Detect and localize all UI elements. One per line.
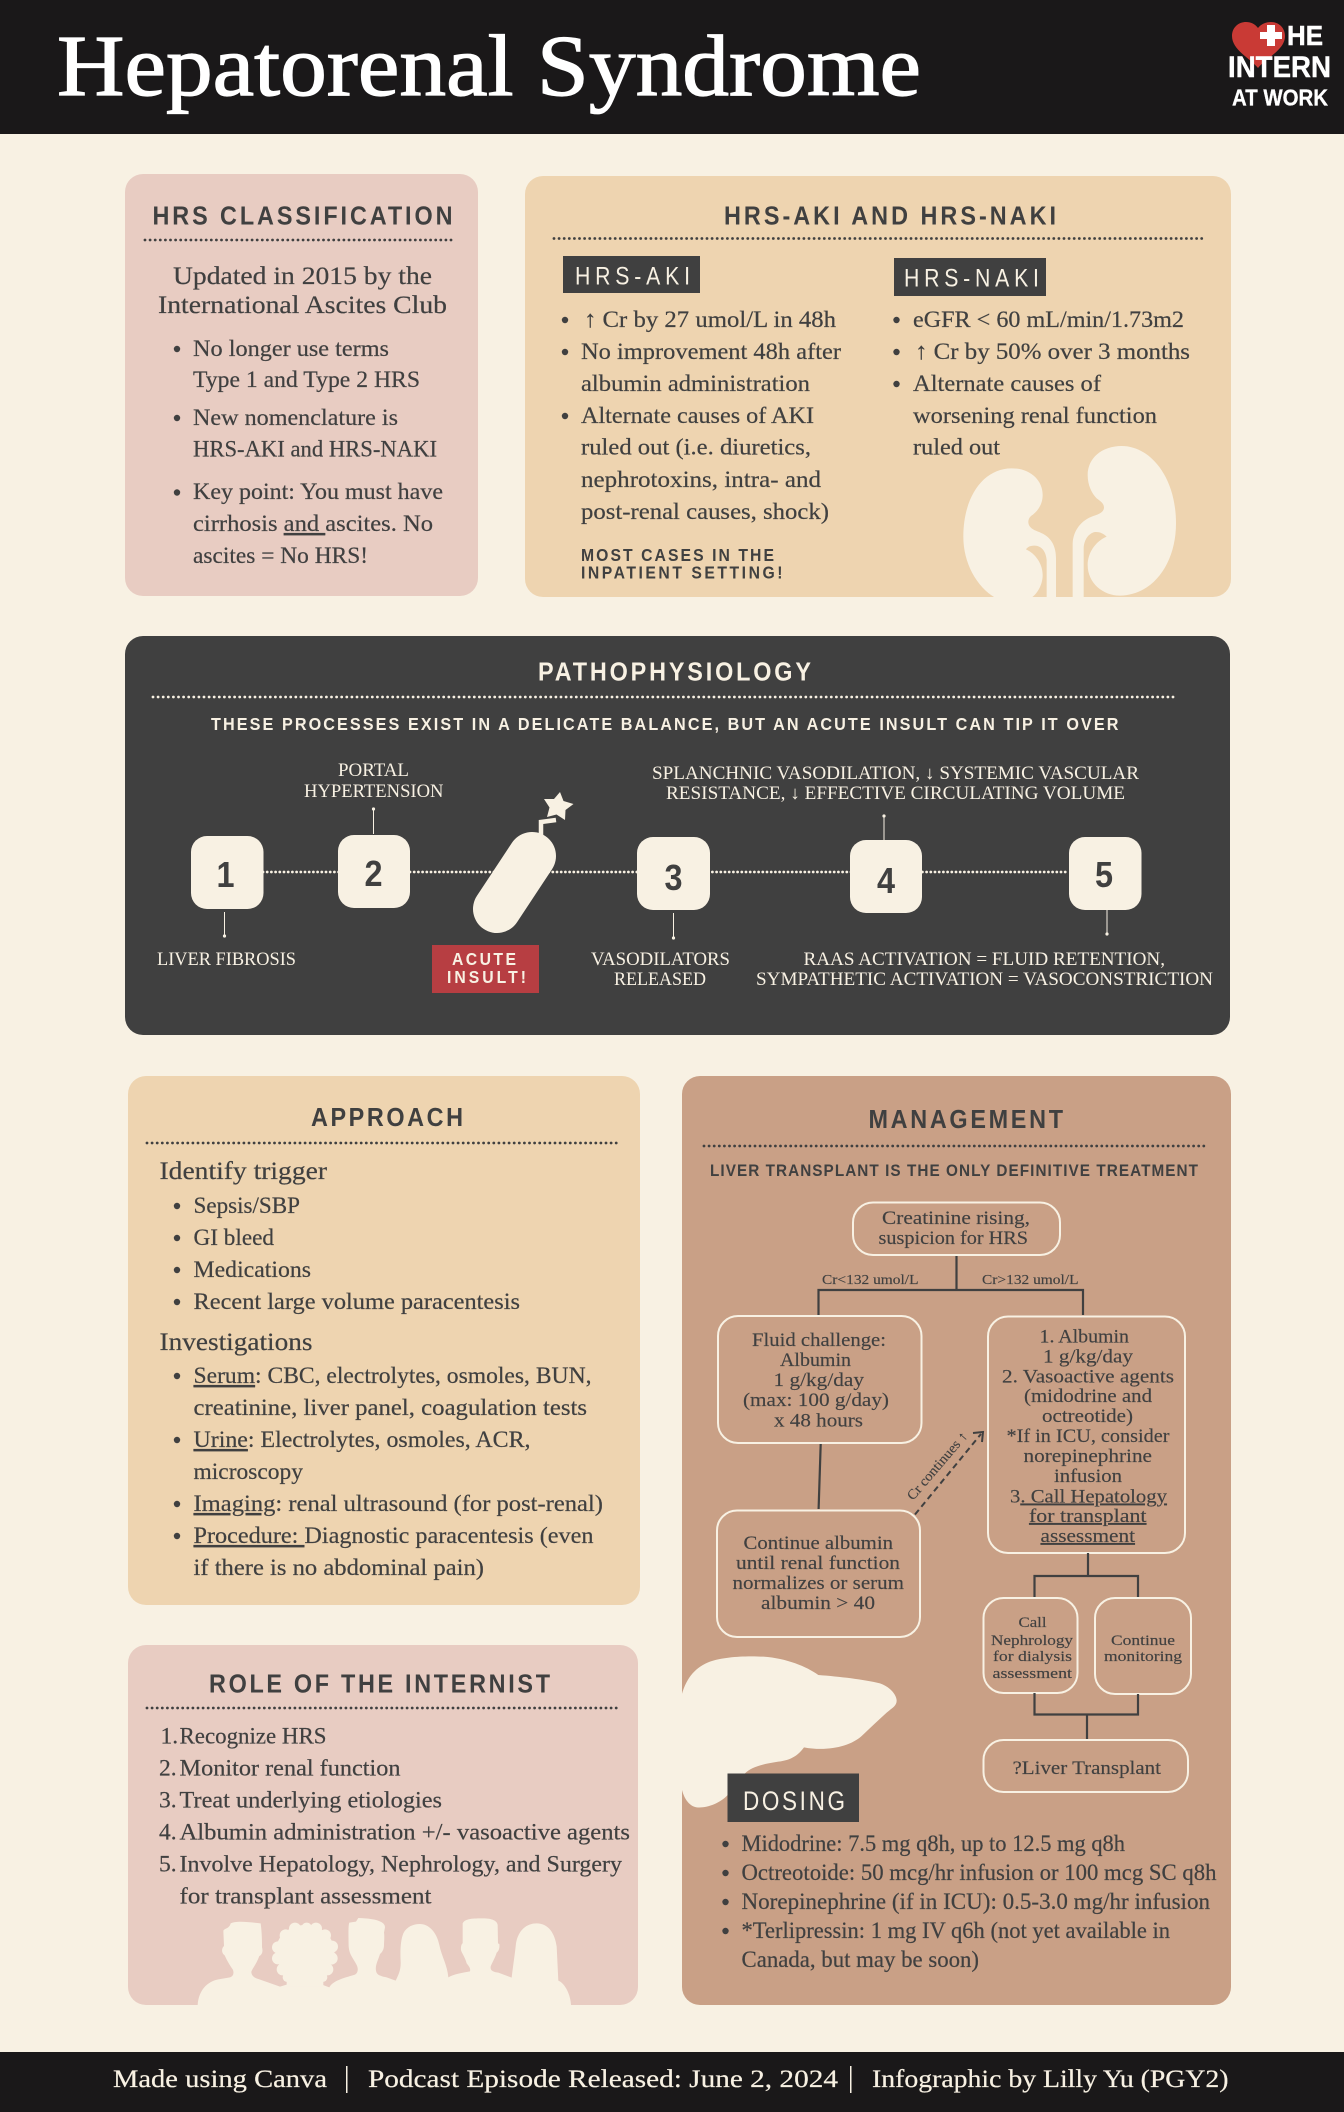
step 5: RAAS and sympathetic activation: 5 [1095,855,1113,895]
bullet list: HRS-AKI criteria: post-renal causes, shock) [581,499,829,525]
flow box: albumin and vasoactive agents: norepinephrine [1024,1447,1152,1467]
bullet list: dosing: *Terlipressin: 1 mg IV q6h (not yet available in [742,1918,1170,1944]
flow box: liver transplant [984,1740,1188,1792]
bullet list: classification: New nomenclature is [193,405,398,431]
bullet list: HRS-AKI criteria: ruled out (i.e. diuretics, [581,434,811,460]
flow box: fluid challenge: 1 g/kg/day [774,1371,865,1391]
bullet list: HRS-AKI criteria: nephrotoxins, intra- and [581,467,821,493]
numbered list: internist role: for transplant assessment [180,1884,432,1910]
tag: dosing: DOSING [743,1787,845,1816]
arrow: creatinine continues rising: Cr continues ↑ [905,1429,971,1504]
heading: approach: APPROACH [311,1104,463,1132]
panel: pathophysiology [125,636,1230,1035]
flow box: continue albumin: albumin > 40 [761,1594,875,1614]
numbered list: internist role: 2. [159,1756,177,1782]
step 2: portal hypertension [304,761,444,908]
bullet list: investigations: Urine: Electrolytes, osmoles, ACR, [194,1427,530,1453]
icon: kidneys [963,446,1176,598]
tag: HRS-AKI [563,256,700,293]
step 4: splanchnic vasodilation [652,764,1140,913]
numbered list: internist role: 5. [159,1852,177,1878]
subheading: identify trigger: Identify trigger [160,1156,328,1185]
bullet list: investigations: Imaging: renal ultrasound (for post-renal) [194,1491,603,1517]
panel: management [682,1076,1231,2005]
intro text: International Ascites Club [158,292,447,319]
flow box: albumin and vasoactive agents: octreotide) [1042,1407,1133,1427]
bullet list: investigations: Procedure: Diagnostic paracentesis (even [194,1523,594,1549]
heading: management: MANAGEMENT [868,1106,1063,1134]
bullet list: classification: Type 1 and Type 2 HRS [193,367,420,393]
note: most cases inpatient [581,545,783,583]
numbered list: internist role: Treat underlying etiologies [180,1788,442,1814]
step 4: splanchnic vasodilation: 4 [877,861,895,901]
tag: HRS-NAKI [894,258,1046,296]
flow box: continue albumin [717,1510,920,1637]
bullet list: HRS-AKI criteria: ↑ Cr by 27 umol/L in 48h [584,307,836,333]
numbered list: internist role: 3. [159,1788,177,1814]
flow box: creatinine rising: Creatinine rising, [882,1209,1030,1229]
bullet list: investigations [174,1363,603,1581]
flow box: continue monitoring [1095,1598,1191,1694]
step 1: liver fibrosis [157,836,296,970]
bullet list: investigations: microscopy [194,1459,303,1485]
logo: The Intern at Work: AT WORK [1232,84,1328,110]
step 2: portal hypertension: 2 [364,854,383,894]
branch label: low creatinine: Cr<132 umol/L [822,1273,918,1288]
connector: to liver transplant [1034,1693,1138,1740]
flow box: call nephrology: Call [1018,1615,1046,1631]
note: most cases inpatient: INPATIENT SETTING! [581,563,783,583]
bullet list: HRS-AKI criteria: albumin administration [581,371,810,397]
bullet list: classification [174,336,443,569]
step 5: RAAS and sympathetic activation: RAAS ACTIVATION = FLUID RETENTION, [804,950,1165,970]
footer: Made using Canva [113,2066,327,2093]
flow box: albumin and vasoactive agents: (midodrine and [1024,1387,1153,1407]
bullet list: triggers: GI bleed [194,1225,274,1251]
panel: HRS-AKI and HRS-NAKI [525,176,1231,598]
step 1: liver fibrosis: LIVER FIBROSIS [157,950,296,970]
bullet list: HRS-AKI criteria [562,307,841,525]
bullet list: dosing: Octreotoide: 50 mcg/hr infusion or 100 mcg SC q8h [742,1860,1217,1886]
flow box: albumin and vasoactive agents: 1 g/kg/day [1043,1348,1134,1368]
bullet list: HRS-NAKI criteria: Alternate causes of [913,371,1101,397]
arrow: creatinine continues rising [905,1429,983,1514]
connector: top branch [818,1255,1083,1315]
step 3: vasodilators released: VASODILATORS [591,950,730,970]
flow box: fluid challenge: Albumin [780,1351,851,1371]
callout: acute insult: ACUTE [452,949,516,969]
branch label: high creatinine: Cr>132 umol/L [982,1273,1078,1288]
bullet list: classification: Key point: You must have [193,479,443,505]
subheading: liver transplant: LIVER TRANSPLANT IS THE ONLY DEFINITIVE TREATMENT [710,1161,1198,1180]
footer: Podcast Episode Released: June 2, 2024 [368,2066,839,2093]
bullet list: triggers: Recent large volume paracentesis [194,1289,520,1315]
step 2: portal hypertension: HYPERTENSION [304,782,444,802]
bullet list: investigations: if there is no abdominal pain) [194,1555,484,1581]
bullet list: HRS-NAKI criteria: eGFR < 60 mL/min/1.73m2 [913,307,1184,333]
bullet list: dosing: Canada, but may be soon) [742,1947,979,1973]
header banner [0,0,1344,134]
step 3: vasodilators released [591,837,730,990]
icon: bomb [497,792,574,909]
title: Hepatorenal Syndrome [57,17,921,114]
bullet list: investigations: Serum: CBC, electrolytes, osmoles, BUN, [194,1363,592,1389]
numbered list: internist role: Monitor renal function [180,1756,401,1782]
step 4: splanchnic vasodilation: SPLANCHNIC VASODILATION, ↓ SYSTEMIC VASCULAR [652,764,1140,784]
logo: The Intern at Work: INTERN [1228,51,1331,84]
bullet list: triggers: Sepsis/SBP [194,1193,300,1219]
heading: HRS classification: HRS CLASSIFICATION [152,202,452,231]
numbered list: internist role: Albumin administration +/- vasoactive agents [180,1820,630,1846]
flow box: liver transplant: ?Liver Transplant [1012,1759,1162,1779]
flow box: call nephrology: assessment [992,1666,1073,1682]
heading: role of the internist: ROLE OF THE INTERNIST [209,1670,550,1699]
flow box: creatinine rising [853,1202,1060,1255]
numbered list: internist role: Recognize HRS [180,1724,326,1750]
footer: Infographic by Lilly Yu (PGY2) [872,2066,1228,2093]
flow box: continue albumin: until renal function [736,1554,900,1574]
connector: lower branch [1034,1553,1138,1598]
tag: HRS-NAKI: HRS-NAKI [904,264,1039,292]
flow box: continue albumin: Continue albumin [744,1534,893,1554]
step 4: splanchnic vasodilation: RESISTANCE, ↓ EFFECTIVE CIRCULATING VOLUME [666,784,1125,804]
step 5: RAAS and sympathetic activation: SYMPATHETIC ACTIVATION = VASOCONSTRICTION [756,970,1213,990]
flow box: fluid challenge: Fluid challenge: [752,1331,886,1351]
panel: role of the internist [128,1645,638,2005]
logo: The Intern at Work [1228,20,1331,110]
tag: dosing [728,1774,859,1822]
note: most cases inpatient: MOST CASES IN THE [581,545,774,565]
flow box: albumin and vasoactive agents [988,1316,1185,1553]
flow box: albumin and vasoactive agents: infusion [1054,1467,1122,1487]
step 5: RAAS and sympathetic activation [756,837,1213,990]
flow box: albumin and vasoactive agents: 3. Call Hepatology [1010,1488,1168,1508]
icon: people silhouettes [198,1918,571,2005]
flow box: albumin and vasoactive agents: *If in ICU, consider [1006,1427,1170,1447]
bullet list: classification: cirrhosis and ascites. No [193,511,433,537]
flow box: call nephrology [984,1598,1078,1693]
intro text [158,263,447,319]
bullet list: HRS-AKI criteria: No improvement 48h after [581,339,841,365]
bullet list: dosing [722,1831,1217,1973]
callout: acute insult: INSULT! [447,967,526,987]
tag: HRS-AKI: HRS-AKI [575,262,690,290]
bullet list: dosing: Midodrine: 7.5 mg q8h, up to 12.5 mg q8h [742,1831,1125,1857]
intro text: Updated in 2015 by the [173,263,432,290]
numbered list: internist role: Involve Hepatology, Nephrology, and Surgery [180,1852,622,1878]
bullet list: classification: ascites = No HRS! [193,543,368,569]
flow box: call nephrology: for dialysis [993,1649,1072,1665]
bullet list: classification: HRS-AKI and HRS-NAKI [193,436,437,462]
bullet list: dosing: Norepinephrine (if in ICU): 0.5-3.0 mg/hr infusion [742,1889,1210,1915]
flow box: call nephrology: Nephrology [991,1633,1074,1649]
numbered list: internist role [159,1724,630,1910]
flow box: creatinine rising: suspicion for HRS [878,1229,1028,1249]
bullet list: triggers [174,1193,520,1315]
numbered list: internist role: 1. [160,1724,178,1750]
bullet list: HRS-NAKI criteria: worsening renal function [913,403,1157,429]
step 1: liver fibrosis: 1 [216,855,235,895]
bullet list: investigations: creatinine, liver panel, coagulation tests [194,1395,587,1421]
flow box: albumin and vasoactive agents: assessment [1040,1527,1136,1547]
subheading: THESE PROCESSES EXIST IN A DELICATE BALANCE, BUT AN ACUTE INSULT CAN TIP IT OVER [211,714,1118,734]
flow box: continue albumin: normalizes or serum [732,1574,905,1594]
bullet list: triggers: Medications [194,1257,311,1283]
panel: HRS classification [125,174,478,596]
flowchart [717,1202,1191,1792]
numbered list: internist role: 4. [159,1820,177,1846]
step 3: vasodilators released: RELEASED [614,970,706,990]
logo: The Intern at Work: HE [1287,20,1323,51]
icon: liver [682,1656,897,1807]
step 3: vasodilators released: 3 [664,858,683,898]
bullet list: HRS-AKI criteria: Alternate causes of AKI [581,403,814,429]
bullet list: classification: No longer use terms [193,336,389,362]
flow box: continue monitoring: monitoring [1104,1649,1183,1665]
flow box: albumin and vasoactive agents: 2. Vasoactive agents [1002,1368,1174,1388]
flow box: fluid challenge: x 48 hours [774,1412,863,1432]
flow box: fluid challenge: (max: 100 g/day) [743,1391,889,1411]
flow box: albumin and vasoactive agents: 1. Albumin [1040,1328,1129,1348]
flow box: albumin and vasoactive agents: for transplant [1029,1507,1148,1527]
flow box: continue monitoring: Continue [1111,1633,1175,1649]
bullet list: HRS-NAKI criteria: ↑ Cr by 50% over 3 months [915,339,1190,365]
heading: HRS-AKI and HRS-NAKI: HRS-AKI AND HRS-NAKI [724,202,1056,231]
footer [0,2052,1344,2112]
bullet list: HRS-NAKI criteria: ruled out [913,434,1000,460]
heading: pathophysiology: PATHOPHYSIOLOGY [538,658,811,687]
flow box: fluid challenge [718,1316,922,1443]
bullet list: HRS-NAKI criteria [893,307,1190,460]
subheading: investigations: Investigations [160,1327,312,1356]
panel: approach [128,1076,640,1605]
step 2: portal hypertension: PORTAL [338,761,409,781]
callout: acute insult [432,945,539,993]
